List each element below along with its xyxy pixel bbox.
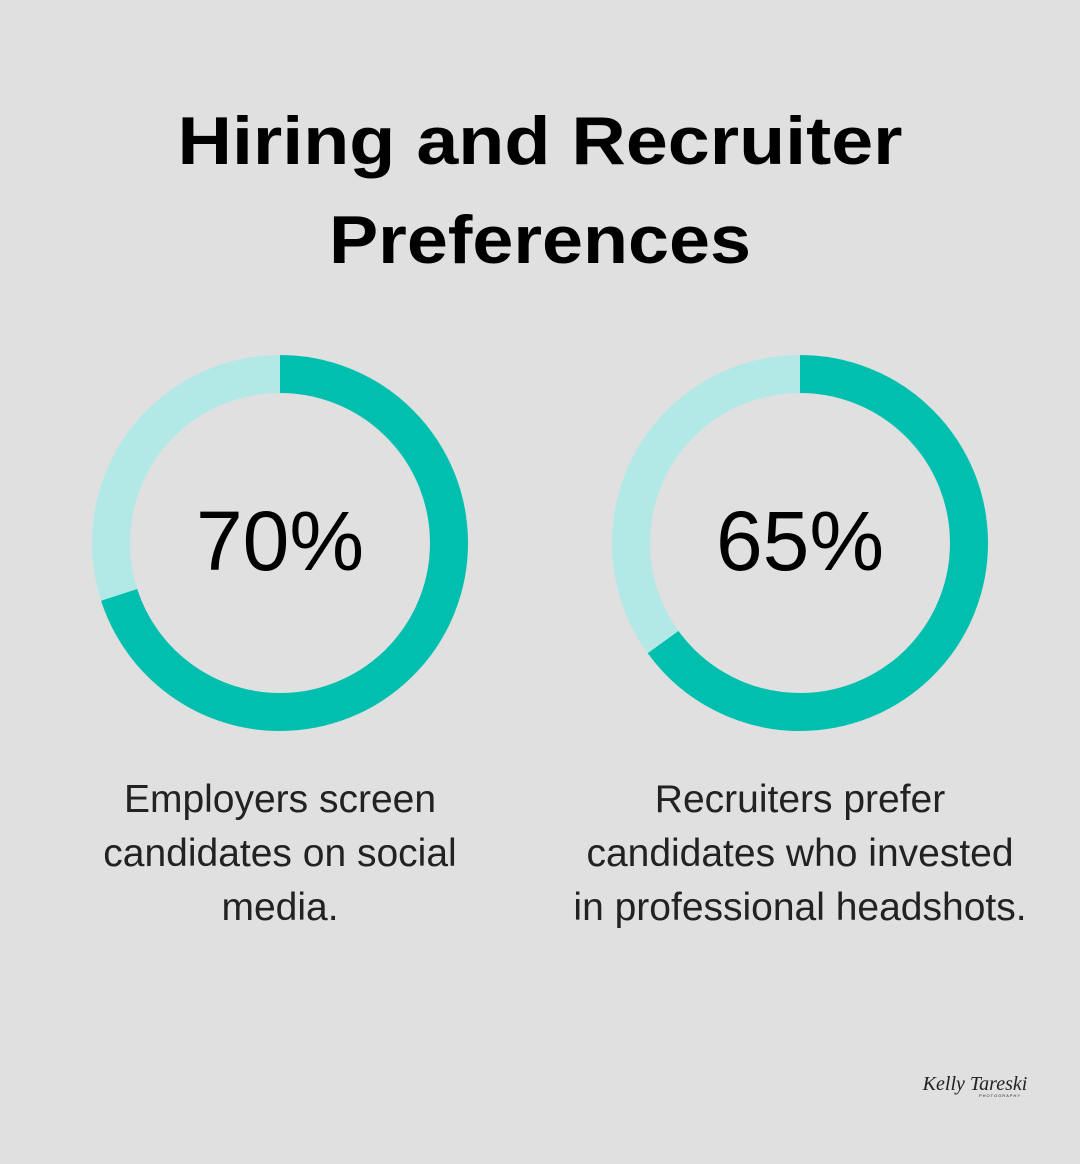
title: Preferences [329,202,751,278]
logo: Kelly Tareski [922,1073,1027,1095]
text: employers: media. [221,886,339,929]
text: employers: Employers screen [124,778,436,821]
text: employers: candidates on social [103,832,457,875]
text: recruiters: Recruiters prefer [655,778,945,821]
stat: 65%: 65% [716,494,884,588]
donut: 65% [631,374,969,712]
text: recruiters: candidates who invested [586,832,1014,875]
title: Hiring and Recruiter [178,103,902,179]
text: recruiters: in professional headshots. [573,886,1027,929]
logo: PHOTOGRAPHY [979,1093,1021,1098]
stat: 70%: 70% [196,494,364,588]
donut: 70% [111,374,449,712]
title [178,103,902,278]
text: recruiters [573,778,1027,929]
text: employers [103,778,457,929]
